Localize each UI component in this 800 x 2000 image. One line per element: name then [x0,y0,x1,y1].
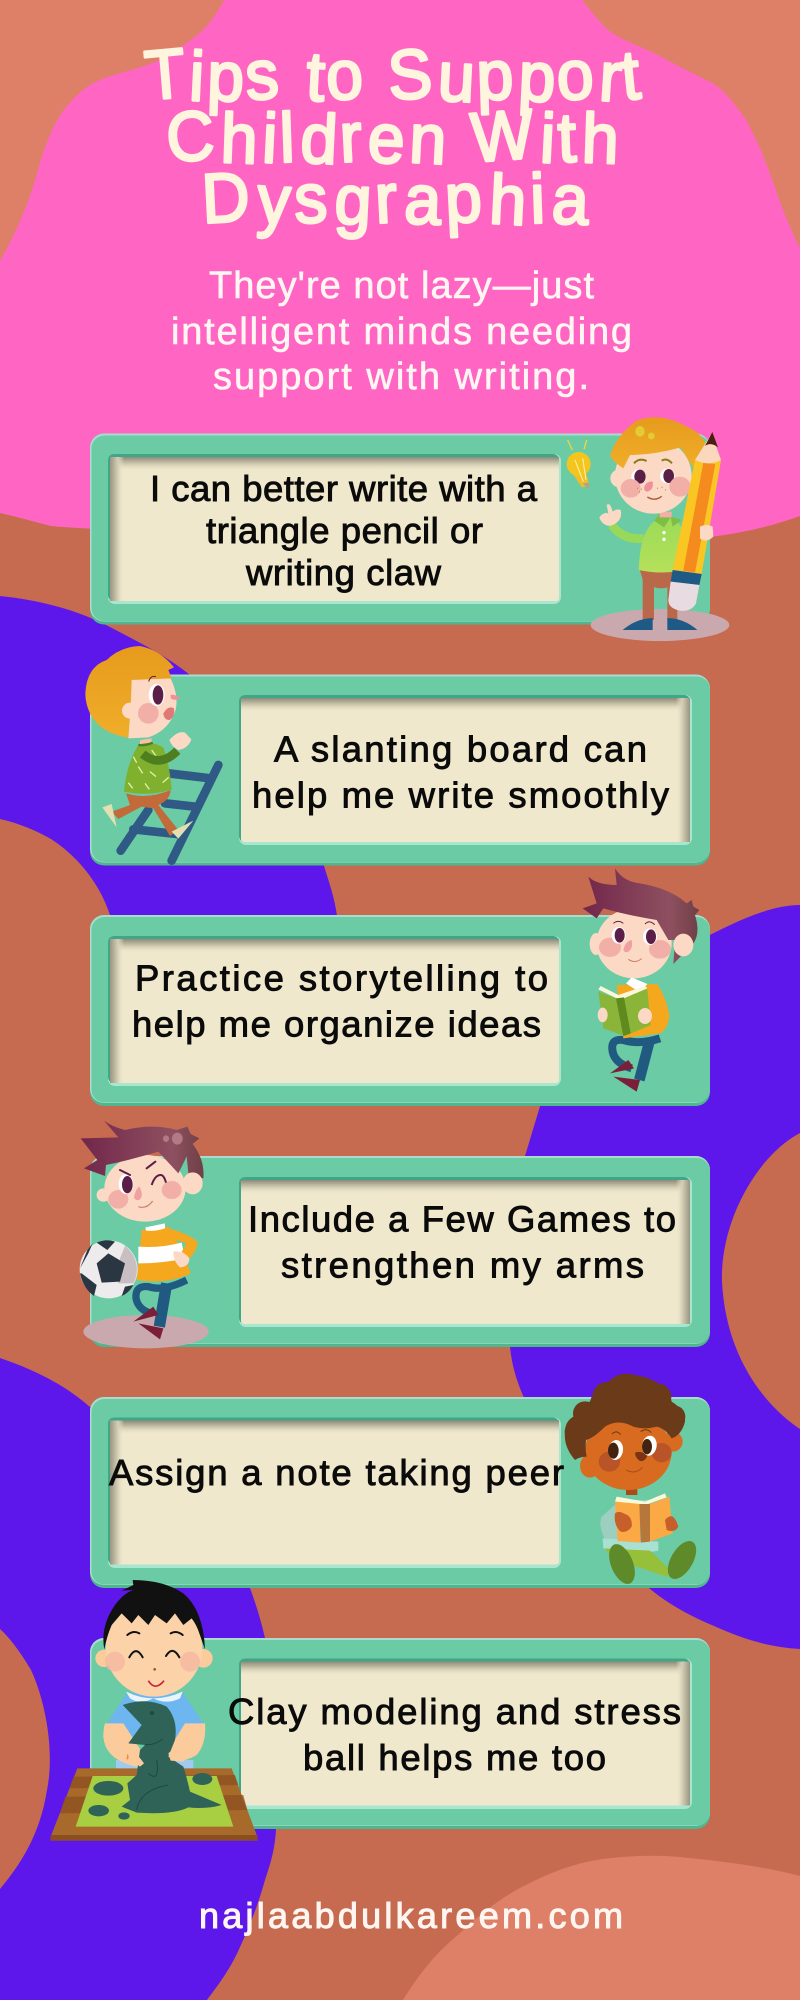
footer website: najlaabdulkareem.com [199,1895,623,1936]
panel: tip 3 storytelling [90,868,710,1106]
title: Tips to Support [142,34,644,117]
tip text: Include a Few Games to [248,1198,676,1240]
card [90,1397,710,1588]
tip text [228,1691,681,1778]
tip text: help me write smoothly [252,774,670,816]
tip text: Practice storytelling to [135,958,548,998]
subtitle: support with writing. [213,356,589,398]
blob: upper left purple [0,596,337,1000]
blob: lower left purple [0,1358,276,2000]
tip text: Clay modeling and stress [228,1691,681,1732]
blob: pink header [0,0,800,540]
blob: right purple [505,905,800,1649]
title [142,34,644,240]
card [90,434,710,624]
icon: boy reading orange book [565,1374,702,1588]
icon: boy reading green book [583,868,699,1092]
tip text: writing claw [245,552,442,593]
tip text: I can better write with a [150,468,538,509]
tip text [252,728,670,816]
tip text: triangle pencil or [206,510,483,551]
card [90,915,710,1106]
subtitle: intelligent minds needing [171,311,632,353]
tip text: help me organize ideas [132,1004,541,1044]
tip text [132,958,548,1044]
panel: tip 6 clay modeling [51,1580,710,1841]
tip text: A slanting board can [274,728,647,770]
subtitle [171,265,632,398]
panel: tip 2 slanting board [85,646,710,866]
icon: boy with clay dinosaur [51,1580,257,1841]
tip text: ball helps me too [303,1737,606,1778]
panel: tip 5 note taking peer [90,1374,710,1588]
title: Children With [164,95,620,179]
card [90,1156,710,1347]
tip text [150,468,538,593]
panel: tip 4 games [80,1121,710,1348]
card [90,1638,710,1829]
tip text [248,1198,676,1286]
card [90,674,710,866]
icon: boy with soccer ball [80,1121,209,1348]
title: Dysgraphia [200,158,590,240]
panel: tip 1 triangle pencil [90,417,729,641]
subtitle: They're not lazy—just [209,265,594,307]
blob: lower right salmon [403,1856,800,2000]
icon: boy climbing ladder [85,646,218,861]
tip text: strengthen my arms [281,1244,644,1286]
icon: boy holding giant pencil [567,417,729,641]
tip text: Assign a note taking peer [109,1452,564,1493]
